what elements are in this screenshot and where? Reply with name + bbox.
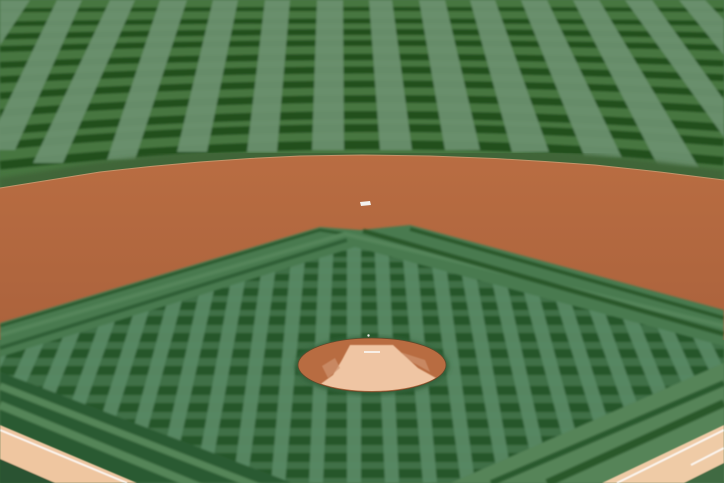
checkerboard mowing area (0, 240, 724, 483)
infield dirt arc (0, 155, 724, 340)
icon: small white marker (367, 334, 370, 337)
outfield dark mowing rows (0, 9, 724, 165)
right foul line dirt (602, 425, 724, 483)
infield dark mowing rows (0, 251, 724, 478)
outfield grass edge ring (0, 155, 724, 188)
right chalk line (617, 430, 724, 483)
top chevron mowing bands (0, 229, 724, 348)
mound dirt (298, 338, 446, 392)
outfield grass (0, 0, 724, 200)
right corner grass (684, 463, 724, 483)
infield grass diamond (0, 225, 724, 483)
outfield light mowing stripes (0, 0, 724, 168)
icon: second base (360, 201, 371, 206)
pitching rubber (364, 351, 380, 353)
lower-right mowing bands (451, 363, 724, 483)
mound shadow (295, 337, 449, 395)
dirt edge highlight (0, 155, 724, 188)
pitcher's mound (295, 337, 449, 395)
right batter's box line (691, 448, 724, 465)
mound light clay (320, 344, 436, 391)
infield light fan stripes (0, 240, 724, 483)
left chalk line (0, 430, 127, 483)
left corner grass (0, 459, 55, 483)
lower-left mowing bands (0, 372, 292, 483)
left foul line dirt (0, 425, 137, 483)
